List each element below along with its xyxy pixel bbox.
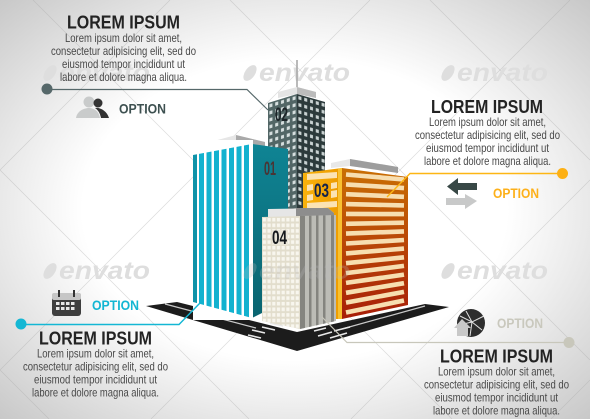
building 03 <box>303 159 408 319</box>
connector 01 <box>21 303 200 324</box>
callout: right top: LOREM IPSUM <box>431 96 543 117</box>
icon: arrows <box>446 178 477 209</box>
connector 02 <box>47 90 268 110</box>
callout: bottom left: OPTION <box>92 298 139 313</box>
callout: top left: consectetur adipisicing elit, sed do <box>51 44 196 58</box>
building 04 <box>262 208 336 330</box>
callout: right top: OPTION <box>493 186 539 201</box>
callout: top left: LOREM IPSUM <box>67 12 180 32</box>
watermarks <box>41 59 548 285</box>
icon: calendar <box>52 290 81 316</box>
callout: top left: labore et dolore magna aliqua. <box>60 70 187 84</box>
watermarks: envato <box>457 257 548 285</box>
callout: bottom right: LOREM IPSUM <box>440 346 553 366</box>
callout: right top: Lorem ipsum dolor sit amet, <box>429 115 546 129</box>
callout: bottom left: consectetur adipisicing elit, sed do <box>23 360 168 374</box>
callout: bottom right: Lorem ipsum dolor sit amet, <box>438 364 555 378</box>
building 02 <box>268 60 325 240</box>
callout: right top: eiusmod tempor incididunt ut <box>426 141 550 155</box>
callout: top left: eiusmod tempor incididunt ut <box>62 57 186 71</box>
callout: bottom right: eiusmod tempor incididunt ut <box>435 390 559 404</box>
callout: bottom left: labore et dolore magna aliqua. <box>32 386 159 400</box>
callout: right top: labore et dolore magna aliqua. <box>424 154 551 168</box>
watermarks: envato <box>59 257 150 285</box>
label 03: 03 <box>314 181 329 202</box>
road <box>146 302 449 351</box>
callout: bottom left: eiusmod tempor incididunt ut <box>34 372 158 386</box>
watermarks: envato <box>59 59 150 87</box>
icon: people <box>76 96 109 118</box>
callout: right top <box>387 96 568 209</box>
callout: top left: OPTION <box>119 102 166 116</box>
callout: bottom right: OPTION <box>497 316 543 331</box>
connector 03 <box>387 174 563 197</box>
watermarks: envato <box>457 59 548 87</box>
watermarks: envato <box>259 59 350 87</box>
callout: bottom left: LOREM IPSUM <box>39 328 152 348</box>
callout: bottom left: Lorem ipsum dolor sit amet, <box>37 346 154 360</box>
connector 04 <box>322 317 569 342</box>
label 02: 02 <box>275 105 288 126</box>
callout: top left <box>42 12 268 118</box>
callout: top left: Lorem ipsum dolor sit amet, <box>65 31 182 45</box>
label 01: 01 <box>264 159 276 180</box>
watermark over buildings: envato <box>259 257 350 285</box>
label 04: 04 <box>272 228 287 249</box>
callout: bottom left <box>16 290 200 400</box>
building 01 <box>193 135 288 320</box>
icon: head with network <box>454 309 485 337</box>
callout: bottom right <box>322 309 574 418</box>
